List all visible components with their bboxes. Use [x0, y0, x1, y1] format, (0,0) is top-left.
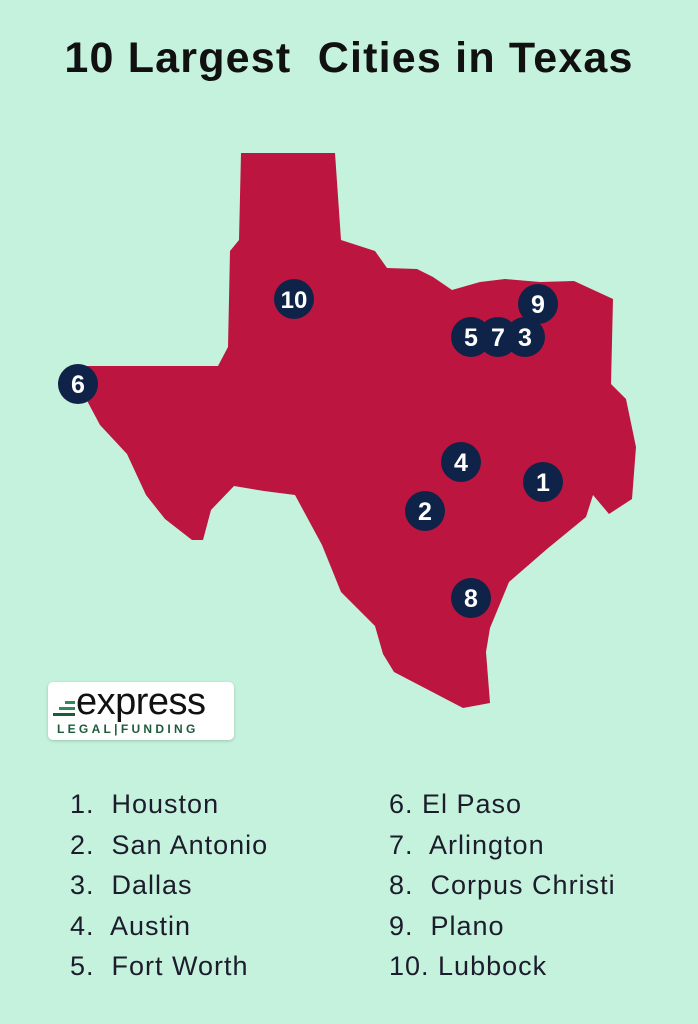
marker 3 [505, 317, 545, 357]
logo wordmark: express [76, 681, 206, 723]
marker 9: 9 [531, 291, 545, 319]
list: cities 6-10: 8. Corpus Christi [389, 870, 616, 900]
marker 1: 1 [536, 469, 550, 497]
list: cities 6-10: 10. Lubbock [389, 951, 547, 981]
logo: Express Legal Funding [48, 682, 234, 740]
marker 7 [478, 317, 518, 357]
marker 5: 5 [464, 324, 478, 352]
marker 7: 7 [491, 324, 505, 352]
list: cities 1-5: 5. Fort Worth [70, 951, 249, 981]
marker 4 [441, 442, 481, 482]
list: cities 6-10 [389, 789, 616, 981]
list: cities 6-10: 9. Plano [389, 910, 505, 940]
marker 3: 3 [518, 324, 532, 352]
list: cities 6-10: 7. Arlington [389, 830, 545, 860]
marker 6: 6 [71, 371, 85, 399]
marker 5 [451, 317, 491, 357]
title: 10 Largest Cities in Texas [64, 34, 634, 82]
marker 1 [523, 462, 563, 502]
list: cities 6-10: 6. El Paso [389, 789, 522, 819]
marker 4: 4 [454, 449, 468, 477]
marker 6 [58, 364, 98, 404]
logo icon: green stripes [53, 701, 75, 716]
marker 2: 2 [418, 498, 432, 526]
Texas shape [70, 153, 636, 708]
list: cities 1-5 [70, 789, 268, 981]
marker 2 [405, 491, 445, 531]
marker 8: 8 [464, 585, 478, 613]
marker 8 [451, 578, 491, 618]
list: cities 1-5: 4. Austin [70, 910, 191, 940]
marker 10 [274, 279, 314, 319]
logo tagline: LEGAL|FUNDING [57, 722, 199, 736]
list: cities 1-5: 3. Dallas [70, 870, 193, 900]
list: cities 1-5: 2. San Antonio [70, 830, 268, 860]
marker 10: 10 [281, 287, 307, 314]
marker 9 [518, 284, 558, 324]
list: cities 1-5: 1. Houston [70, 789, 219, 819]
